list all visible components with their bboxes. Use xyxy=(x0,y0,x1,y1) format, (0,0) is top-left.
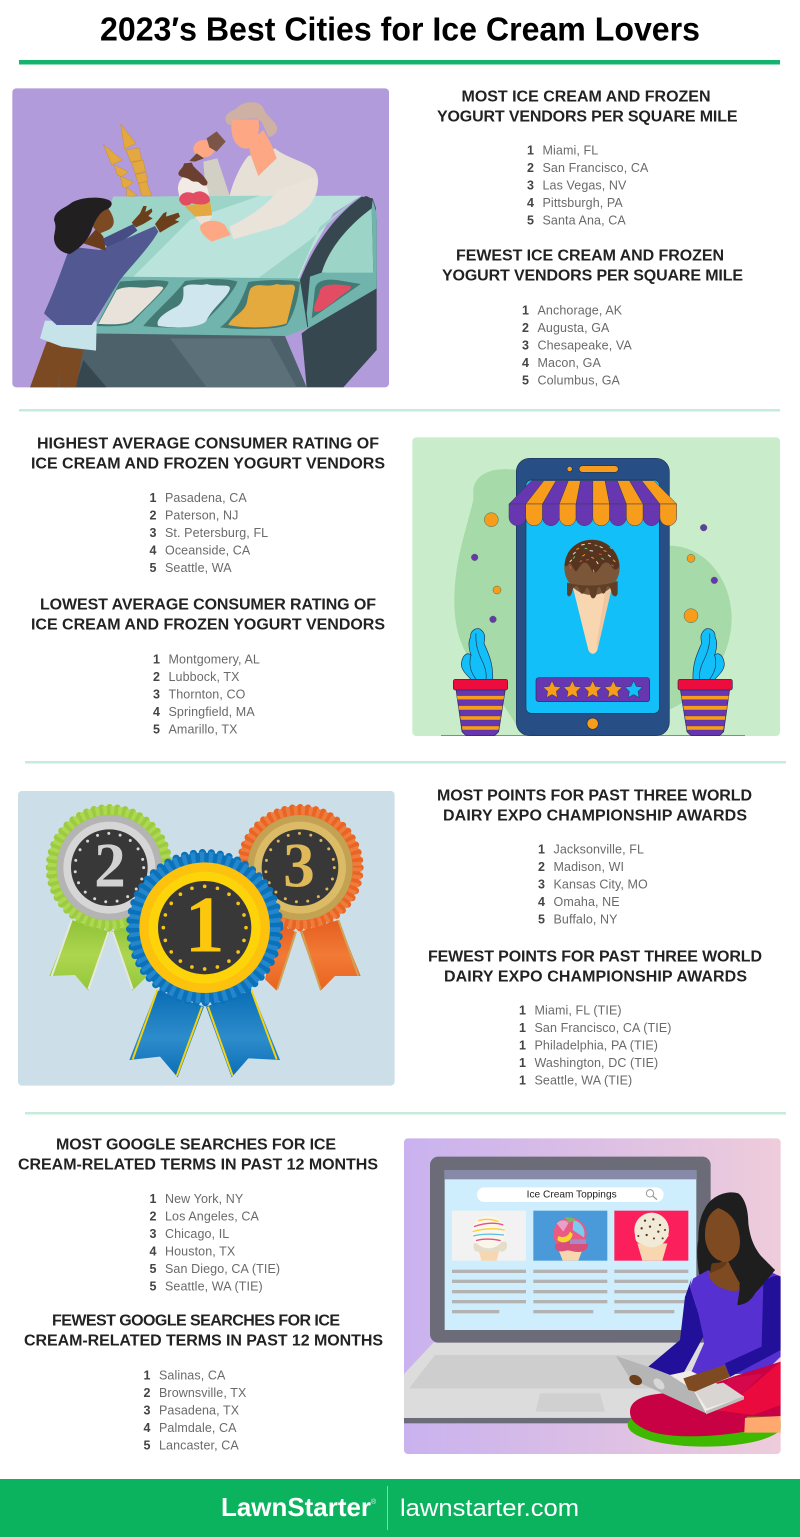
list: most vendors: 3 xyxy=(527,178,534,192)
section 3 top: most points heading xyxy=(437,788,752,825)
list: most vendors: Pittsburgh, PA xyxy=(542,196,623,210)
list: fewest points: 1 xyxy=(519,1021,526,1035)
section 2 bottom: lowest rating heading xyxy=(31,597,385,634)
list: most points: Buffalo, NY xyxy=(554,912,618,926)
section 3 bottom: fewest points heading: FEWEST POINTS FOR PAST THREE WORLD xyxy=(428,949,762,966)
list: fewest vendors xyxy=(522,304,632,388)
section 3 bottom: fewest points heading: DAIRY EXPO CHAMPIONSHIP AWARDS xyxy=(444,969,747,986)
list: most searches: San Diego, CA (TIE) xyxy=(165,1262,280,1276)
list: most points: 1 xyxy=(538,842,545,856)
section 4 bottom: fewest searches heading: FEWEST GOOGLE SEARCHES FOR ICE xyxy=(52,1313,340,1330)
result card: rainbow sprinkles xyxy=(452,1211,526,1261)
list: fewest searches: 4 xyxy=(144,1421,151,1435)
list: highest rating: Seattle, WA xyxy=(165,561,232,575)
list: most vendors: 4 xyxy=(527,196,534,210)
illustration: phone storefront with ice cream xyxy=(412,437,780,736)
list: most searches: Chicago, IL xyxy=(165,1227,229,1241)
list: most points: Kansas City, MO xyxy=(554,878,648,892)
title underline xyxy=(19,60,780,64)
section 1 top: most vendors heading: MOST ICE CREAM AND FROZEN xyxy=(462,89,710,106)
footer band: ® xyxy=(371,1498,377,1506)
list: highest rating: 5 xyxy=(150,561,157,575)
section 1 top: most vendors heading: YOGURT VENDORS PER SQUARE MILE xyxy=(437,109,738,126)
right plant pot xyxy=(678,629,732,736)
neck and face xyxy=(708,1258,740,1291)
panel background xyxy=(404,1138,781,1454)
list: most points: 4 xyxy=(538,895,545,909)
rosette: first place xyxy=(130,853,280,1003)
large laptop screen xyxy=(430,1157,711,1343)
list: lowest rating xyxy=(153,652,260,736)
list: most points: Jacksonville, FL xyxy=(554,842,644,856)
footer band xyxy=(0,1479,800,1537)
section 4 bottom: fewest searches heading: CREAM-RELATED TERMS IN PAST 12 MONTHS xyxy=(24,1333,383,1350)
list: most searches: Seattle, WA (TIE) xyxy=(165,1280,263,1294)
list: most searches: 3 xyxy=(150,1227,157,1241)
list: fewest vendors: 4 xyxy=(522,356,529,370)
list: fewest searches: Salinas, CA xyxy=(159,1368,226,1382)
list: lowest rating: Montgomery, AL xyxy=(168,652,260,666)
list: fewest vendors: Macon, GA xyxy=(538,356,601,370)
list: fewest points: 1 xyxy=(519,1004,526,1018)
vendor sleeve and hand over the case xyxy=(200,177,317,242)
search bar xyxy=(477,1187,664,1202)
vendor xyxy=(189,102,318,213)
list: most searches: 2 xyxy=(150,1210,157,1224)
list: highest rating: Oceanside, CA xyxy=(165,544,251,558)
sprinkles xyxy=(570,543,615,572)
list: lowest rating: 3 xyxy=(153,688,160,702)
section 4 top: most searches heading: MOST GOOGLE SEARCHES FOR ICE xyxy=(56,1137,336,1154)
section 1 bottom: fewest vendors heading: FEWEST ICE CREAM AND FROZEN xyxy=(456,248,724,265)
website: lawnstarter.com xyxy=(400,1495,579,1522)
illustration: woman searching ice cream toppings on laptop xyxy=(404,1138,782,1454)
list: most searches: New York, NY xyxy=(165,1192,244,1206)
list: fewest points: 1 xyxy=(519,1056,526,1070)
ice cream cone xyxy=(564,540,620,654)
list: highest rating: St. Petersburg, FL xyxy=(165,526,268,540)
section 4 bottom: fewest searches heading xyxy=(24,1313,383,1350)
list: lowest rating: 4 xyxy=(153,705,160,719)
ribbon: second place xyxy=(49,920,147,991)
list: lowest rating: 5 xyxy=(153,722,160,736)
list: most vendors: 2 xyxy=(527,161,534,175)
list: lowest rating: Springfield, MA xyxy=(168,705,255,719)
phone xyxy=(516,458,669,736)
rosette: third place xyxy=(240,807,360,928)
illustration: award rosettes xyxy=(18,791,395,1086)
list: fewest points: 1 xyxy=(519,1038,526,1052)
list: fewest vendors: 5 xyxy=(522,374,529,388)
section 3 top: most points heading: DAIRY EXPO CHAMPIONSHIP AWARDS xyxy=(443,808,747,825)
list: most searches: 5 xyxy=(150,1280,157,1294)
list: fewest searches: Brownsville, TX xyxy=(159,1386,247,1400)
list: most vendors: 5 xyxy=(527,214,534,228)
small laptop xyxy=(670,1371,744,1413)
list: fewest points: 1 xyxy=(519,1074,526,1088)
awning xyxy=(509,481,677,526)
section 2 bottom: lowest rating heading: ICE CREAM AND FROZEN YOGURT VENDORS xyxy=(31,617,385,634)
search bar: Ice Cream Toppings xyxy=(527,1190,617,1201)
list: fewest vendors: 2 xyxy=(522,321,529,335)
list: most vendors: 1 xyxy=(527,144,534,158)
list: lowest rating: Thornton, CO xyxy=(168,688,246,702)
star rating xyxy=(536,678,650,702)
ice cream cone being served xyxy=(178,163,213,226)
section 4 top: most searches heading: CREAM-RELATED TERMS IN PAST 12 MONTHS xyxy=(18,1157,378,1174)
list: fewest searches: 2 xyxy=(144,1386,151,1400)
list: lowest rating: 2 xyxy=(153,670,160,684)
section 1 top: most vendors heading xyxy=(437,89,738,126)
ribbon: first place xyxy=(129,990,280,1077)
list: fewest searches xyxy=(144,1368,247,1452)
panel background xyxy=(412,437,780,736)
section 3 bottom: fewest points heading xyxy=(428,949,762,986)
list: most points: Omaha, NE xyxy=(554,895,620,909)
list: most searches: 1 xyxy=(150,1192,157,1206)
section 2 top: highest rating heading xyxy=(31,436,385,473)
large laptop base xyxy=(404,1342,741,1424)
rosette: first place: 1 xyxy=(185,882,225,970)
woman with laptop xyxy=(616,1192,782,1447)
list: highest rating xyxy=(150,491,268,575)
list: fewest points xyxy=(519,1004,672,1088)
list: lowest rating: Lubbock, TX xyxy=(168,670,240,684)
list: fewest vendors: 1 xyxy=(522,304,529,318)
rosette: second place xyxy=(49,807,170,928)
list: most searches: Houston, TX xyxy=(165,1244,236,1258)
list: fewest points: San Francisco, CA (TIE) xyxy=(534,1021,672,1035)
list: lowest rating: Amarillo, TX xyxy=(168,722,238,736)
hair back xyxy=(697,1192,775,1297)
list: fewest searches: 1 xyxy=(144,1368,151,1382)
list: most points: 2 xyxy=(538,860,545,874)
list: fewest points: Seattle, WA (TIE) xyxy=(534,1074,632,1088)
placeholder text lines xyxy=(452,1270,688,1313)
list: most vendors: San Francisco, CA xyxy=(542,161,649,175)
list: fewest points: Washington, DC (TIE) xyxy=(534,1056,658,1070)
section 4 top: most searches heading xyxy=(18,1137,378,1174)
section 2 top: highest rating heading: HIGHEST AVERAGE CONSUMER RATING OF xyxy=(37,436,379,453)
stacked cones xyxy=(103,124,152,197)
list: most searches xyxy=(150,1192,280,1294)
list: highest rating: 3 xyxy=(150,526,157,540)
list: highest rating: Paterson, NJ xyxy=(165,508,238,522)
list: lowest rating: 1 xyxy=(153,652,160,666)
list: most points: Madison, WI xyxy=(554,860,624,874)
list: fewest searches: 3 xyxy=(144,1404,151,1418)
section 1 bottom: fewest vendors heading xyxy=(442,248,743,285)
list: fewest vendors: 3 xyxy=(522,338,529,352)
result card: candy topping xyxy=(533,1211,607,1261)
left plant pot xyxy=(453,629,508,736)
list: fewest searches: 5 xyxy=(144,1438,151,1452)
list: most points xyxy=(538,842,648,926)
section 3 top: most points heading: MOST POINTS FOR PAST THREE WORLD xyxy=(437,788,752,805)
list: highest rating: Pasadena, CA xyxy=(165,491,247,505)
child xyxy=(30,198,180,387)
hair front xyxy=(718,1198,775,1305)
list: most searches: 4 xyxy=(150,1244,157,1258)
list: most searches: Los Angeles, CA xyxy=(165,1210,259,1224)
list: most points: 3 xyxy=(538,878,545,892)
list: most searches: 5 xyxy=(150,1262,157,1276)
list: fewest searches: Pasadena, TX xyxy=(159,1404,240,1418)
crossed legs xyxy=(630,1362,781,1436)
section 2 bottom: lowest rating heading: LOWEST AVERAGE CONSUMER RATING OF xyxy=(40,597,376,614)
list: fewest vendors: Columbus, GA xyxy=(538,374,621,388)
illustration: ice cream vendor and child xyxy=(12,88,389,387)
panel background xyxy=(12,88,389,387)
list: fewest searches: Palmdale, CA xyxy=(159,1421,237,1435)
tray windows xyxy=(97,279,300,329)
rosette: second place: 2 xyxy=(94,831,126,901)
panel background xyxy=(18,791,395,1086)
sleeves xyxy=(648,1278,703,1375)
list: fewest vendors: Chesapeake, VA xyxy=(538,338,632,352)
list: fewest searches: Lancaster, CA xyxy=(159,1438,239,1452)
list: fewest vendors: Augusta, GA xyxy=(538,321,610,335)
torso xyxy=(690,1270,781,1375)
list: highest rating: 4 xyxy=(150,544,157,558)
list: highest rating: 2 xyxy=(150,508,157,522)
list: fewest points: Miami, FL (TIE) xyxy=(534,1004,622,1018)
section 1 bottom: fewest vendors heading: YOGURT VENDORS PER SQUARE MILE xyxy=(442,268,743,285)
section 2 top: highest rating heading: ICE CREAM AND FROZEN YOGURT VENDORS xyxy=(31,456,385,473)
list: most points: 5 xyxy=(538,912,545,926)
list: most vendors xyxy=(527,144,649,228)
floating dots xyxy=(471,513,718,623)
rosette: third place: 3 xyxy=(283,831,315,901)
title: 2023′s Best Cities for Ice Cream Lovers xyxy=(100,10,700,48)
result card: chocolate chip xyxy=(614,1211,688,1261)
list: highest rating: 1 xyxy=(150,491,157,505)
background blobs xyxy=(454,469,732,727)
list: fewest points: Philadelphia, PA (TIE) xyxy=(534,1038,658,1052)
brand logo text: LawnStarter xyxy=(221,1492,371,1522)
list: fewest vendors: Anchorage, AK xyxy=(538,304,623,318)
list: most vendors: Miami, FL xyxy=(542,144,598,158)
display case xyxy=(53,196,377,387)
list: most vendors: Santa Ana, CA xyxy=(542,214,626,228)
hand xyxy=(683,1365,730,1392)
list: most vendors: Las Vegas, NV xyxy=(542,178,627,192)
ribbon: third place xyxy=(265,920,361,991)
